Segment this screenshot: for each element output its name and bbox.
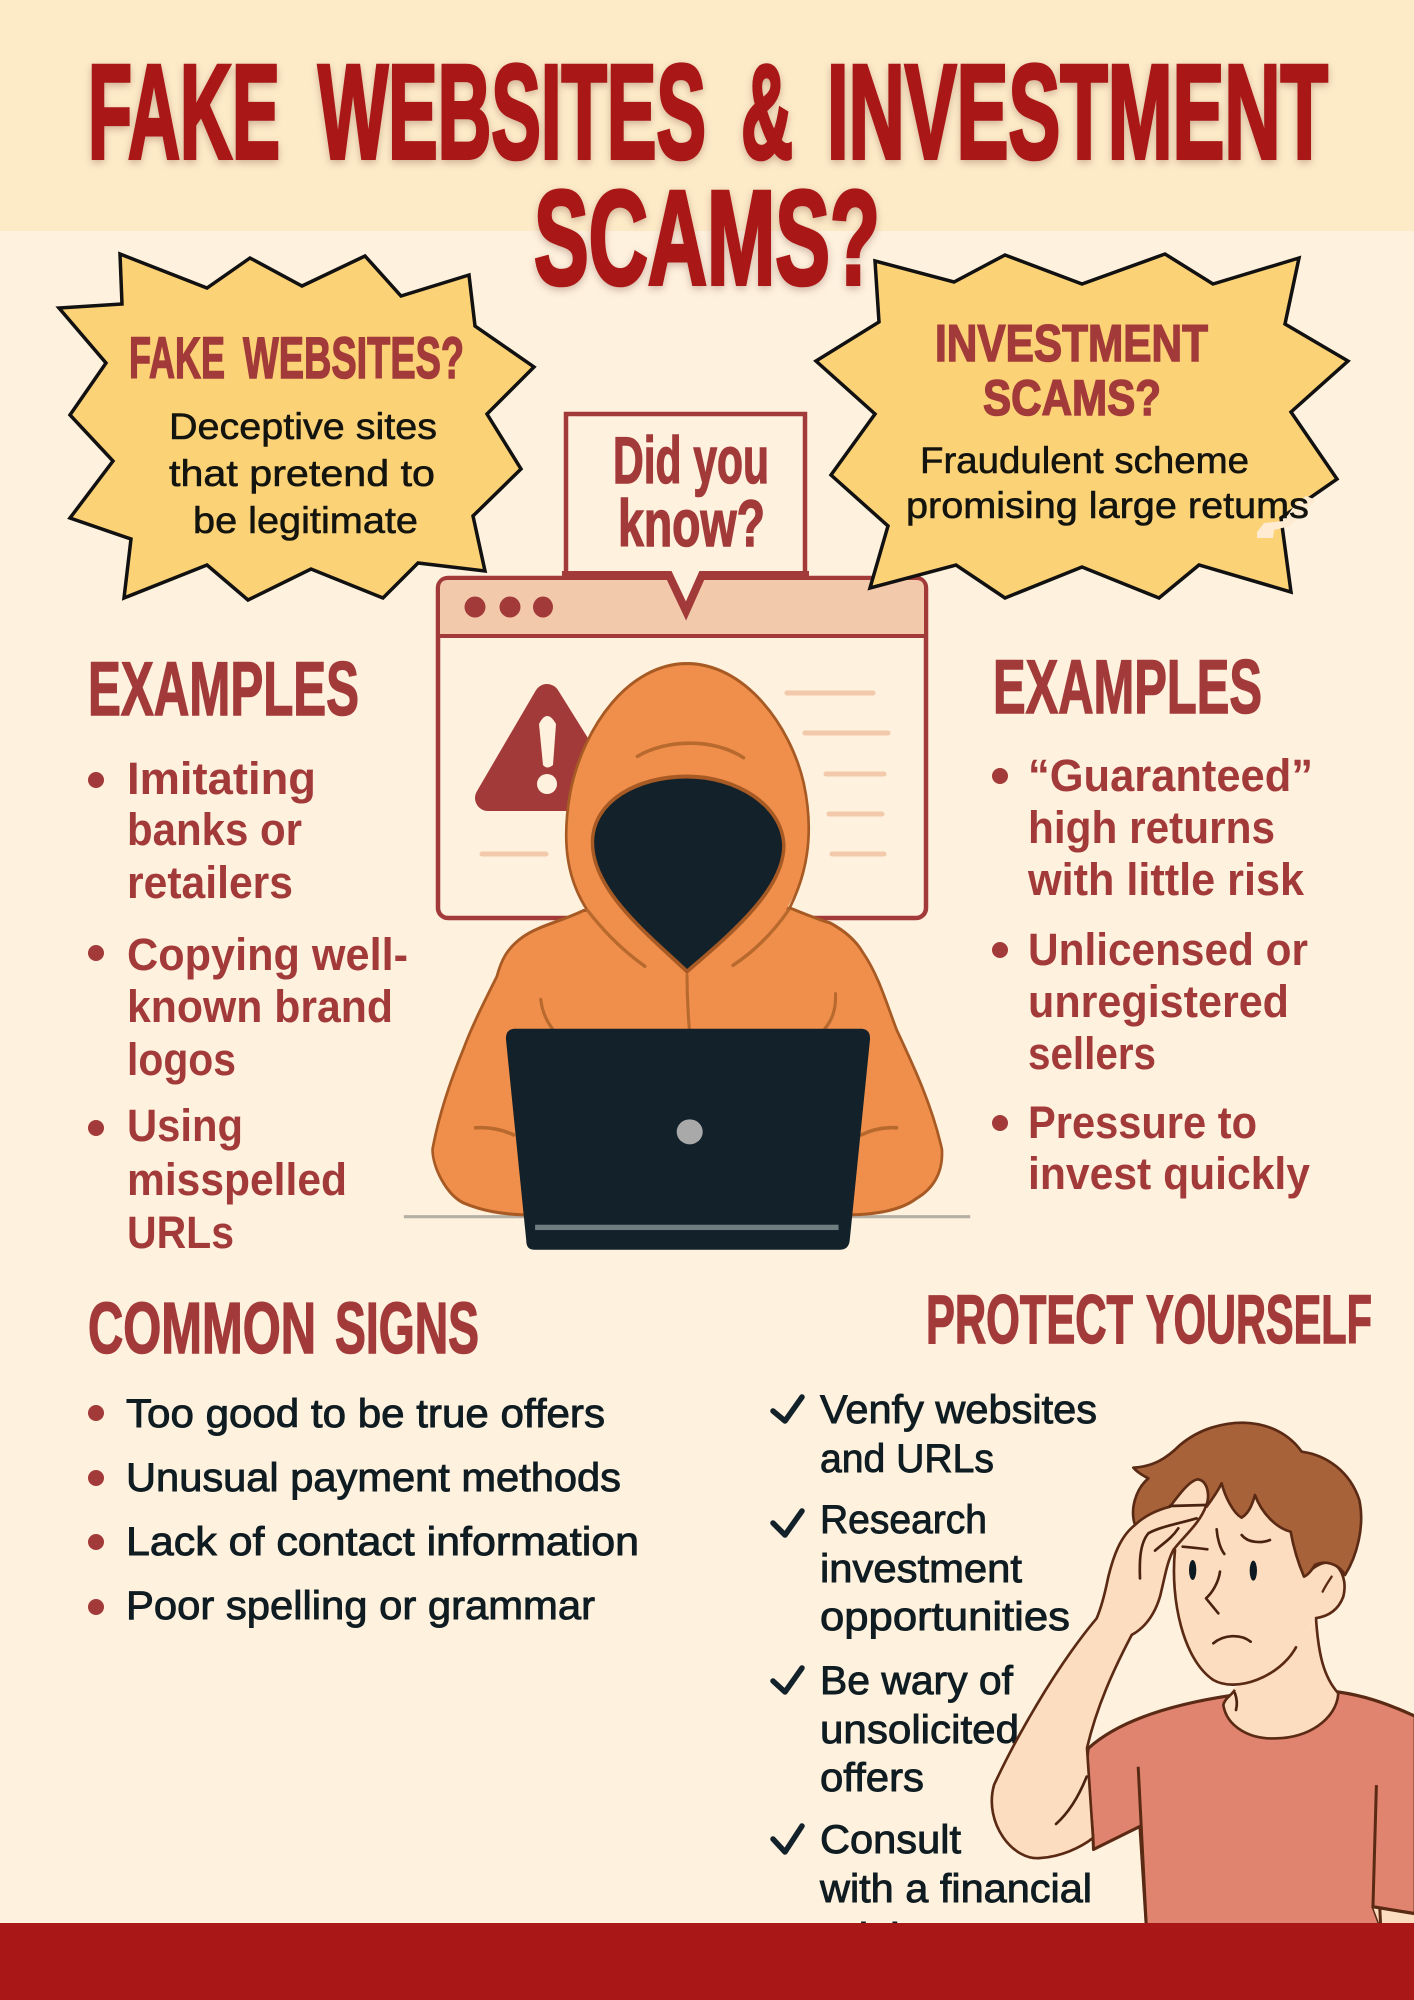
title	[88, 38, 1328, 313]
browser window	[438, 578, 926, 918]
callout text: Did you	[613, 423, 769, 497]
list left	[127, 753, 408, 1258]
title: FAKE	[88, 38, 280, 187]
list left: known brand	[127, 981, 393, 1032]
list protect yourself: with a financial	[819, 1867, 1092, 1911]
list left: Copying well-	[127, 929, 408, 980]
eyes	[1189, 1560, 1257, 1581]
burst shape right	[816, 254, 1348, 598]
heading: common signs: COMMON	[88, 1289, 316, 1369]
list right: sellers	[1028, 1028, 1156, 1079]
list left: URLs	[127, 1207, 234, 1258]
window dots	[464, 596, 553, 618]
bullets common signs	[88, 1405, 104, 1615]
bullets left	[88, 772, 104, 1136]
definition text: investment scams	[906, 440, 1309, 526]
shirt	[1087, 1692, 1414, 1927]
heading: common signs: SIGNS	[335, 1289, 479, 1369]
list left: retailers	[127, 857, 293, 908]
right burst panel: investment scams	[816, 254, 1348, 598]
callout text: know?	[618, 486, 765, 560]
title: SCAMS?	[534, 164, 880, 313]
hoodie seams	[475, 743, 897, 1135]
list right: high returns	[1028, 802, 1275, 853]
list protect yourself: Research	[820, 1498, 987, 1542]
heading: fake websites: FAKE	[129, 326, 225, 391]
list right: “Guaranteed”	[1028, 750, 1313, 801]
placeholder text lines	[482, 693, 888, 854]
neck	[1223, 1618, 1338, 1738]
definition text: fake websites: that pretend to	[169, 453, 435, 494]
heading: protect yourself: PROTECT	[926, 1281, 1133, 1358]
list protect yourself: unsolicited	[820, 1708, 1019, 1752]
list protect yourself: and URLs	[820, 1437, 994, 1481]
definition text: investment scams: Fraudulent scheme	[920, 440, 1249, 481]
list protect yourself: Venfy websites	[820, 1388, 1097, 1432]
panel: protect yourself	[773, 1281, 1372, 1960]
list left: misspelled	[127, 1154, 347, 1205]
list protect yourself	[819, 1388, 1097, 1960]
definition text: fake websites	[169, 406, 437, 541]
check icons	[773, 1397, 802, 1852]
illustration: worried man	[992, 1423, 1414, 1927]
callout text	[613, 423, 769, 560]
list protect yourself: Consult	[820, 1818, 961, 1862]
list right: Pressure to	[1028, 1097, 1257, 1148]
list left: Using	[127, 1100, 243, 1151]
list right: invest quickly	[1028, 1148, 1310, 1199]
heading: examples right: EXAMPLES	[993, 645, 1262, 730]
list right: Unlicensed or	[1028, 924, 1308, 975]
list protect yourself: opportunities	[820, 1595, 1070, 1639]
heading: investment scams	[935, 315, 1208, 426]
list left: Imitating	[127, 753, 316, 804]
list common signs: Lack of contact information	[126, 1520, 639, 1564]
panel: common signs	[88, 1289, 639, 1628]
list right	[1027, 750, 1313, 1199]
window title bar	[440, 580, 924, 634]
panel: left examples	[88, 647, 408, 1258]
bullets right	[992, 768, 1008, 1131]
hood	[566, 664, 809, 975]
callout: did you know	[562, 414, 809, 612]
definition text: fake websites: Deceptive sites	[169, 406, 437, 447]
list common signs	[126, 1392, 639, 1628]
heading: investment scams: INVESTMENT	[935, 315, 1208, 373]
list common signs: Poor spelling or grammar	[126, 1584, 595, 1628]
heading: investment scams: SCAMS?	[983, 370, 1161, 426]
heading: examples left: EXAMPLES	[88, 647, 359, 732]
list protect yourself: advisor	[820, 1916, 960, 1960]
definition text: investment scams: promising large retums	[906, 485, 1309, 526]
dark face	[592, 777, 784, 972]
face	[1174, 1483, 1340, 1685]
list protect yourself: offers	[820, 1756, 924, 1800]
window frame	[438, 578, 926, 918]
header band	[0, 0, 1414, 231]
definition text: fake websites: be legitimate	[193, 500, 418, 541]
icon: warning triangle	[488, 697, 610, 798]
list protect yourself: investment	[820, 1547, 1022, 1591]
list common signs: Too good to be true offers	[126, 1392, 605, 1436]
list left: banks or	[127, 804, 302, 855]
arm and hand	[992, 1479, 1208, 1858]
list common signs: Unusual payment methods	[126, 1456, 621, 1500]
burst shape left	[59, 254, 534, 600]
heading: fake websites: WEBSITES?	[243, 326, 464, 391]
list right: with little risk	[1027, 854, 1305, 905]
panel: right examples	[992, 645, 1313, 1199]
left burst panel: fake websites	[59, 254, 534, 600]
ear	[1304, 1562, 1345, 1618]
hair	[1133, 1423, 1361, 1577]
list right: unregistered	[1028, 976, 1289, 1027]
list left: logos	[127, 1034, 236, 1085]
illustration: hooded hacker at laptop	[404, 664, 970, 1250]
title: &	[741, 38, 793, 187]
face and finger lines	[1056, 1505, 1270, 1824]
laptop	[506, 1029, 870, 1250]
title: WEBSITES	[318, 38, 706, 187]
hoodie body	[433, 908, 942, 1215]
heading: fake websites	[129, 326, 464, 391]
head, hair, hand and arm	[992, 1423, 1361, 1858]
footer band	[0, 1923, 1414, 2000]
list protect yourself: Be wary of	[820, 1659, 1014, 1703]
